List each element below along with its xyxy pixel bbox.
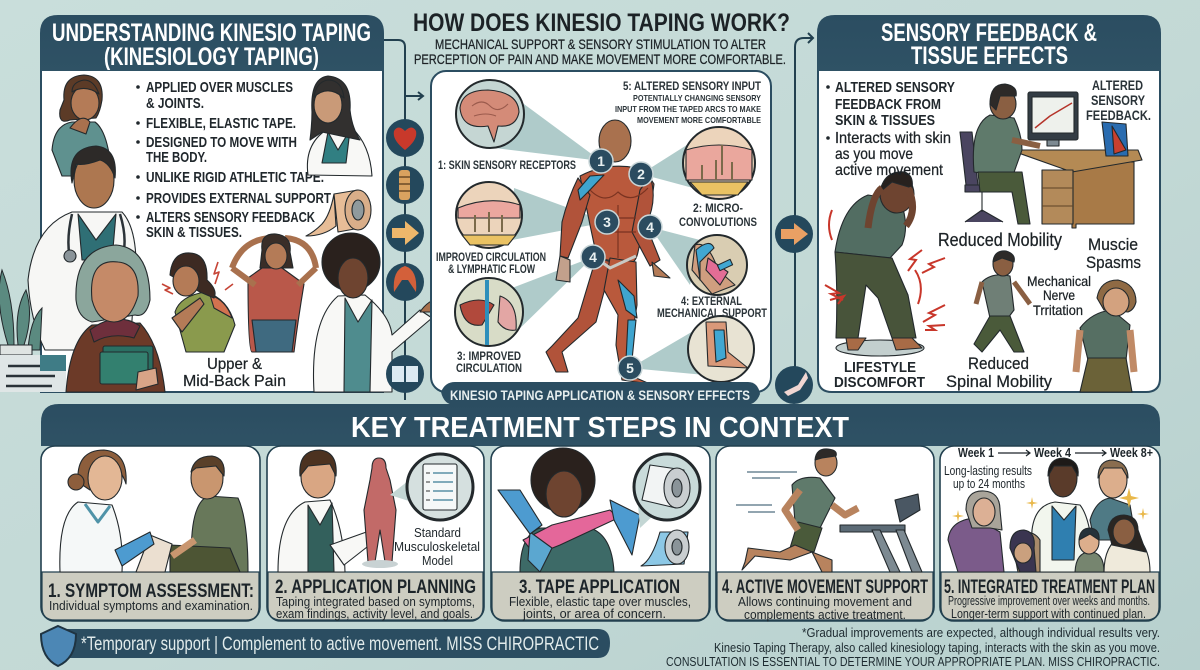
figure: woman holding neck	[52, 75, 110, 176]
text: altered sensory feedback label: SENSORY	[1091, 93, 1145, 108]
caption: upper and mid-back pain: Mid-Back Pain	[183, 373, 286, 390]
figure: female doctor upper right	[307, 76, 372, 176]
text: feedback bullets: SKIN & TISSUES	[835, 112, 935, 129]
title block: MECHANICAL SUPPORT & SENSORY STIMULATION TO ALTER	[435, 36, 766, 52]
panel heading: UNDERSTANDING KINESIO TAPING	[52, 19, 371, 47]
diagram caption banner	[441, 382, 760, 405]
diagram labels: INPUT FROM THE TAPED ARCS TO MAKE	[615, 104, 761, 114]
model label: Musculoskeletal	[394, 539, 480, 554]
text: altered sensory feedback label: FEEDBACK.	[1086, 108, 1151, 123]
circle: skin layers	[456, 182, 522, 248]
bullet list: ALTERS SENSORY FEEDBACK	[146, 209, 315, 226]
text: figure captions: Reduced Mobility	[938, 230, 1062, 250]
figure: man bent over holding head	[835, 172, 924, 356]
text: figure captions	[834, 230, 1141, 391]
caption	[944, 577, 1155, 621]
caption: joints, or area of concern.	[522, 606, 666, 621]
caption: upper and mid-back pain	[183, 356, 286, 390]
bullet list: & JOINTS.	[146, 95, 204, 112]
numbered markers	[581, 149, 662, 380]
circle: liver and lungs	[455, 278, 523, 346]
step card 4: active movement support	[716, 446, 934, 622]
text: feedback bullets: ALTERED SENSORY	[835, 79, 955, 96]
icons: gold sparkles	[952, 488, 1149, 522]
panel heading	[52, 19, 371, 71]
bullet list: THE BODY.	[146, 149, 207, 166]
step card 1: symptom assessment	[41, 446, 260, 621]
circle: brain	[456, 80, 524, 148]
diagram labels: MOVEMENT MORE COMFORTABLE	[637, 115, 761, 125]
title block: PERCEPTION OF PAIN AND MAKE MOVEMENT MORE COMFORTABLE.	[414, 51, 786, 67]
caption	[48, 581, 254, 613]
panel: understanding kinesio taping	[0, 15, 440, 392]
diagram labels: 5: ALTERED SENSORY INPUT	[623, 81, 761, 93]
bullet list: DESIGNED TO MOVE WITH	[146, 134, 297, 151]
text: altered sensory feedback label	[1086, 78, 1151, 123]
caption: complements active treatment.	[744, 607, 906, 622]
diagram labels: MECHANICAL SUPPORT	[657, 308, 767, 320]
circle: foot tape	[688, 316, 754, 382]
diagram labels: 3: IMPROVED	[457, 351, 521, 363]
icons: red pain sparks	[825, 210, 945, 330]
numbered markers: 5	[626, 360, 634, 376]
icon: beige tape roll	[306, 190, 371, 236]
section heading: KEY TREATMENT STEPS IN CONTEXT	[351, 412, 849, 444]
illustration: runner and treadmill	[736, 449, 922, 572]
illustration: patient receiving shoulder tape	[498, 448, 700, 572]
panel header band	[40, 15, 384, 71]
panel header band	[817, 15, 1161, 71]
caption: 3. TAPE APPLICATION	[519, 577, 680, 598]
caption	[509, 577, 691, 621]
bullet list: SKIN & TISSUES.	[146, 224, 242, 241]
bullet list: APPLIED OVER MUSCLES	[146, 79, 293, 96]
diagram labels	[436, 81, 767, 375]
caption: 1. SYMPTOM ASSESSMENT:	[48, 581, 254, 602]
text: figure captions: Trritation	[1033, 302, 1083, 318]
caption: upper and mid-back pain: Upper &	[207, 356, 262, 373]
callout beams	[478, 90, 705, 375]
caption: 4. ACTIVE MOVEMENT SUPPORT	[722, 577, 928, 598]
connector lines and arrows between panels	[383, 33, 813, 400]
text: figure captions: Mechanical	[1027, 273, 1091, 289]
text: figure captions: Spasms	[1086, 253, 1141, 272]
step card 5: integrated treatment plan	[940, 445, 1160, 621]
text: figure captions: Reduced	[968, 354, 1029, 373]
bullet list: PROVIDES EXTERNAL SUPPORT	[146, 190, 331, 207]
text: figure captions: LIFESTYLE	[844, 359, 916, 376]
text: figure captions: DISCOMFORT	[834, 374, 925, 391]
footnotes	[666, 625, 1160, 669]
timeline labels: Week 8+	[1110, 445, 1153, 460]
numbered markers: 1	[597, 153, 605, 169]
figure: small walking man	[974, 251, 1030, 352]
timeline labels	[944, 445, 1153, 491]
timeline labels: Long-lasting results	[944, 463, 1032, 478]
diagram labels: 2: MICRO-	[693, 203, 743, 215]
model label	[394, 525, 480, 568]
diagram labels: CIRCULATION	[456, 363, 522, 375]
panel: key treatment steps	[41, 404, 1160, 622]
text: figure captions: Muscie	[1088, 235, 1138, 254]
figure: older woman with books	[66, 245, 165, 392]
model label: Standard	[414, 525, 461, 540]
diagram labels: & LYMPHATIC FLOW	[448, 264, 535, 276]
diagram labels: POTENTIALLY CHANGING SENSORY	[633, 93, 761, 103]
circle: knee tape	[687, 235, 747, 295]
illustration: nurse examining knee	[60, 450, 248, 572]
illustration: doctor with model and clipboard	[278, 450, 473, 572]
text: feedback bullets: as you move	[835, 146, 913, 163]
bullet list	[136, 79, 331, 241]
caption: exam findings, activity level, and goals.	[276, 606, 473, 621]
anatomy figure: walking muscle man	[546, 120, 670, 384]
text: figure captions: Nerve	[1043, 287, 1075, 303]
caption: Taping integrated based on symptoms,	[276, 594, 475, 609]
circle: micro-convolutions	[683, 127, 755, 199]
diagram caption banner: KINESIO TAPING APPLICATION & SENSORY EFFECTS	[450, 387, 750, 403]
footnotes: *Gradual improvements are expected, although individual results very.	[802, 625, 1160, 640]
banner bar	[56, 629, 610, 658]
title block	[413, 9, 790, 67]
figure: male doctor	[28, 146, 136, 350]
caption	[275, 577, 476, 621]
model label: Model	[422, 553, 453, 568]
text: feedback bullets: FEEDBACK FROM	[835, 96, 941, 113]
timeline labels: Week 1	[958, 445, 994, 460]
disclaimer banner with shield	[41, 626, 610, 666]
bullet list: UNLIKE RIGID ATHLETIC TAPE.	[146, 169, 324, 186]
caption: Longer-term support with continued plan.	[951, 606, 1146, 621]
diagram frame	[431, 71, 771, 392]
figure: doctor with afro gesturing	[314, 233, 440, 392]
diagram labels: 1: SKIN SENSORY RECEPTORS	[438, 160, 576, 172]
panel heading: SENSORY FEEDBACK &	[881, 19, 1097, 47]
title block: HOW DOES KINESIO TAPING WORK?	[413, 9, 790, 37]
icon column left: benefit icons	[386, 119, 424, 393]
panel body	[818, 40, 1160, 392]
text: feedback bullets	[826, 79, 955, 179]
figure: man working at desk	[960, 84, 1142, 228]
panel: anatomy diagram	[431, 71, 771, 405]
caption: Flexible, elastic tape over muscles,	[509, 594, 691, 609]
figure: plant and stack of books	[0, 270, 66, 392]
numbered markers: 2	[637, 166, 645, 182]
numbered markers: 4	[646, 219, 654, 235]
figure: woman with olive shirt	[162, 253, 235, 352]
step card 2: application planning	[267, 446, 484, 621]
bullet list: FLEXIBLE, ELASTIC TAPE.	[146, 115, 296, 132]
panel heading	[881, 19, 1097, 70]
numbered markers: 3	[603, 214, 611, 230]
timeline labels: up to 24 months	[953, 476, 1025, 491]
section backing and header	[41, 404, 1160, 446]
panel heading: TISSUE EFFECTS	[911, 42, 1068, 70]
text: feedback bullets: Interacts with skin	[835, 130, 951, 147]
diagram labels: IMPROVED CIRCULATION	[436, 252, 546, 264]
step card 3: tape application	[491, 446, 710, 621]
numbered markers: 4	[589, 249, 597, 265]
figure: boy leaning	[1076, 280, 1136, 392]
banner text: *Temporary support | Complement to active movement. MISS CHIROPRACTIC	[81, 634, 599, 655]
caption: Allows continuing movement and	[738, 594, 912, 609]
diagram labels: 4: EXTERNAL	[681, 296, 742, 308]
icon column right: arrow and runner icons	[775, 215, 813, 404]
panel: sensory feedback and tissue effects	[817, 15, 1161, 392]
panel heading: (KINESIOLOGY TAPING)	[104, 43, 319, 71]
caption: 2. APPLICATION PLANNING	[275, 577, 476, 598]
text: altered sensory feedback label: ALTERED	[1092, 78, 1143, 93]
caption	[722, 577, 928, 622]
timeline labels: Week 4	[1034, 445, 1072, 460]
caption: Individual symptoms and examination.	[49, 598, 253, 613]
panel body	[41, 40, 383, 392]
icon: shield	[41, 626, 76, 666]
diagram labels: CONVOLUTIONS	[679, 217, 757, 229]
illustration: care team and family	[948, 458, 1150, 572]
figure: woman in red shirt holding head	[232, 234, 316, 352]
text: figure captions: Spinal Mobility	[946, 372, 1052, 391]
text: feedback bullets: active movement	[835, 162, 943, 179]
